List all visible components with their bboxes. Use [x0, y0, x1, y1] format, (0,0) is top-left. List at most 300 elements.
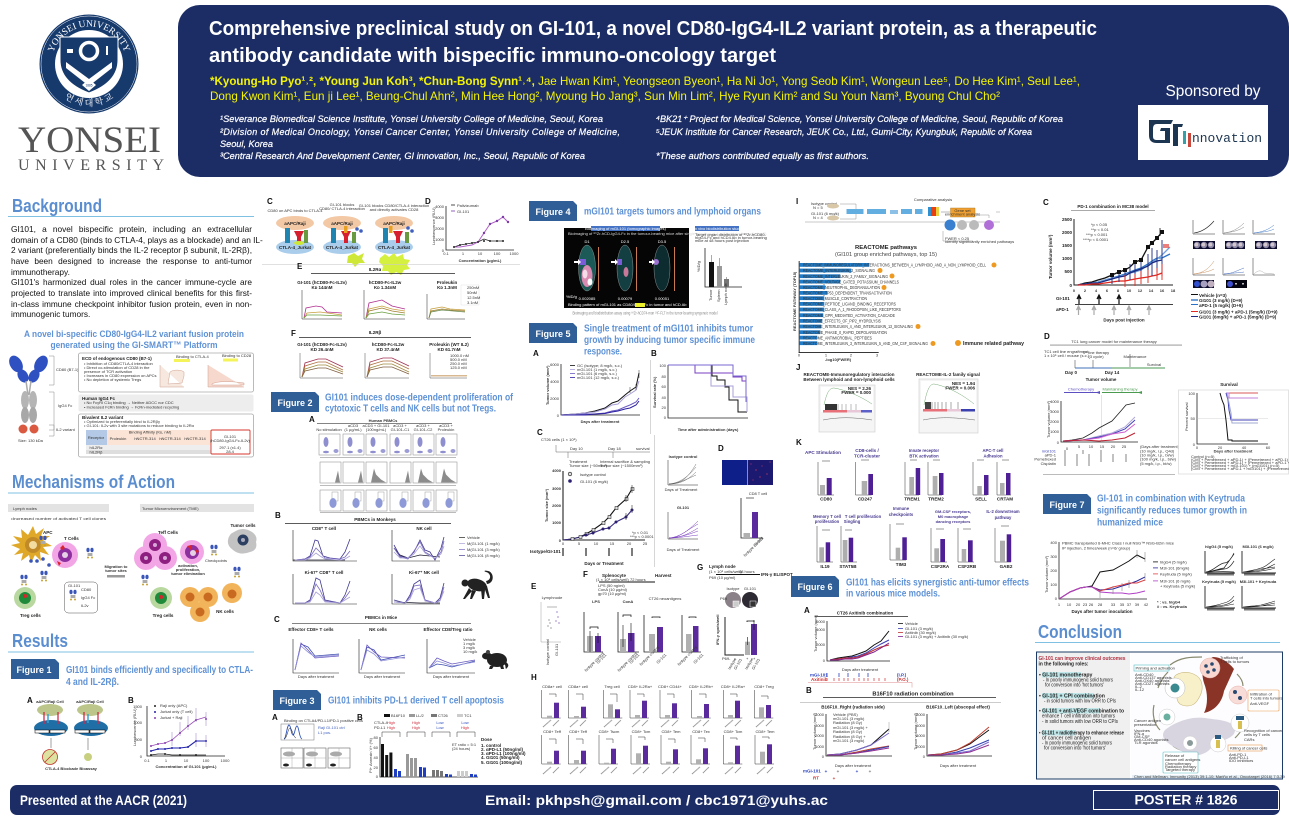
section heading: background: Background	[12, 196, 102, 216]
figure 6B heading	[800, 686, 1001, 702]
figure 6B: right side chart: Days after treatment	[835, 763, 872, 768]
figure 1A: blockade bioassay: aAPC/Raji Cell	[76, 699, 104, 704]
cancer immunity cycle diagram: Anti-CD27 agonists	[1135, 681, 1169, 686]
tumor volume chart: 10	[1089, 444, 1094, 449]
figure 5K: gene expression bar charts: APC Stimulation	[805, 450, 841, 455]
figure 2A: human PBMC flow cytometry: A	[309, 415, 315, 424]
conference note: Presented at the AACR (2021)	[20, 792, 187, 808]
figure 1B: dose response chart: 0.1	[144, 758, 151, 763]
panel: ECD of CD80: • No depletion of systemic Tregs	[84, 377, 141, 382]
figure 7C: PD-1 combination in MC38: Tumor volume (mm³)	[1048, 234, 1053, 279]
figure 7: individual tumor curves: Keytruda (5 mg/k)	[1202, 579, 1237, 584]
survival chart: 100	[1188, 391, 1196, 396]
figure 3B: apoptosis bar chart: High	[461, 725, 469, 730]
tumor volume chart: 2000	[1050, 419, 1060, 424]
reactome bar chart: REACTOME_IMMUNOREGULATORY_INTERACTIONS_BETWEEN_A_LYMPHOID_AND_A_NON_LYMPHOID_CELL	[803, 262, 986, 268]
figure 7C: PD-1 combination in MC38: **p < 0.01	[1091, 227, 1109, 232]
figure 2B: PBMCs in monkeys charts: NK cell	[416, 526, 432, 531]
figure 2C: PBMCs in mice charts: Days after treatment	[364, 674, 401, 679]
background paragraph: immunogenic tumors.	[11, 309, 90, 319]
header banner	[178, 5, 1289, 177]
background paragraph: domain of a CD80 (binds to CTLA-4, plays as a blockade) and an IL-	[11, 235, 263, 245]
figure 5F: splenocyte bar charts: Isotype control	[616, 651, 638, 673]
figure 5B: survival chart: 0	[664, 415, 667, 420]
figure 4: biodistribution bar chart: %ID/g	[696, 261, 701, 272]
figure 7 heading: humanized mice	[1097, 518, 1163, 528]
tumor volume chart: 0	[1057, 440, 1060, 445]
conclusion text: enhance T cell infiltration into tumors	[1042, 714, 1115, 720]
diagram: tumor microenvironment: tumor elimination	[171, 571, 205, 576]
figure 5B: survival chart: Time after administration (days)	[678, 427, 739, 432]
figure 1C: blockade diagrams: aAPC/Raji	[383, 221, 405, 226]
figure 4: bioimaging of mGI-101: Bioimaging of mGI-101 (tomographic images)	[585, 226, 667, 231]
figure 6A: CT26 axitinib chart: (I.P.)	[897, 672, 907, 678]
figure 7C: PD-1 combination in MC38: PD-1 combination in MC38 model	[1077, 204, 1149, 209]
figure 7: individual tumor curves	[1202, 544, 1277, 610]
figure 6B: right side chart: +	[869, 769, 872, 774]
figure 6A: CT26 axitinib chart: mGI-101	[810, 672, 828, 678]
figure 2A: human PBMC flow cytometry: Proleukin	[438, 427, 454, 432]
figure 2B: PBMCs in monkeys charts: PBMCs in Monkeys	[354, 517, 396, 522]
figure 5H: immune cell bar charts: CD8+ Tcm	[632, 729, 651, 734]
figure 3B: apoptosis bar chart: High	[387, 720, 395, 725]
figure 7: humanized mice tumor volume chart: 26	[1089, 602, 1094, 607]
figure 7: humanized mice tumor volume chart: M3I-101 (6mg/k)	[1160, 566, 1190, 570]
reactome bar chart: REACTOME PATHWAY (TOP15)	[792, 271, 797, 331]
figure 5J: GSEA enrichment plots: J	[796, 363, 800, 372]
figure 6A: CT26 axitinib chart: 2000	[816, 642, 826, 647]
figure 5J: GSEA enrichment plots: NES = 1.94	[952, 381, 975, 386]
figure 3B: apoptosis bar chart: High	[387, 725, 395, 730]
figure 5K: gene expression bar charts: checkpoints	[889, 512, 914, 517]
figure 7: humanized mice tumor volume chart: 400	[1050, 540, 1058, 545]
figure 5K: gene expression bar charts: proliferation	[815, 519, 840, 524]
antibody structure diagram: IL2 variant	[56, 427, 76, 432]
figure 5C: treatment timeline: survival	[636, 446, 650, 451]
figure 6 heading: in various mice models.	[846, 588, 940, 600]
figure 5F: splenocyte bar charts: GI-101	[628, 652, 641, 665]
section heading: results: Results	[12, 631, 68, 651]
subtitle: platform: A novel bi-specific CD80-IgG4-IL2 variant fusion protein	[24, 329, 244, 340]
figure 5C: tumor size chart: Isotype/GI-101	[530, 549, 561, 554]
figure 5A: tumor volume chart: mGI-101 (6 mg/k, s.c.)	[577, 371, 617, 376]
figure 5 heading: response.	[584, 346, 622, 358]
figure 5K: gene expression bar charts: Memory T cell	[813, 514, 841, 519]
figure 6A: CT26 axitinib chart: CT26 Axitinib combination	[837, 610, 894, 616]
figure 1C: blockade diagrams: CTLA-4_Jurkat	[378, 245, 411, 250]
cancer immunity cycle diagram: GM-CSF	[1134, 734, 1150, 739]
sponsored by label: Sponsored by	[1166, 83, 1260, 100]
tumor volume chart: 3000	[1050, 409, 1060, 414]
figure 1D: luminescence chart: GI-101	[457, 209, 470, 214]
figure 5F: splenocyte bar charts: Isotype control	[676, 645, 698, 667]
figure 1D: luminescence chart: 4000	[435, 204, 445, 209]
figure 1F: IL2R beta binding: 1000.0 nM	[450, 353, 469, 358]
figure 7: humanized mice tumor volume chart: # : vs. Keytruda	[1157, 604, 1188, 609]
figure 7C: PD-1 combination in MC38: 0	[1073, 288, 1076, 293]
figure 5G: lymph node harvest chart: Isotype	[727, 656, 738, 670]
figure 5G: lymph node harvest chart: Isotype	[744, 656, 755, 670]
figure 5F: splenocyte bar charts: Isotype control	[638, 645, 660, 667]
figure 5D: immunofluorescence and bar chart: GI-101	[752, 535, 765, 548]
figure 1D: luminescence chart: Luminescence (RLU)	[431, 207, 436, 245]
figure 5J: GSEA enrichment plots: REACTOME-IL-2 family signal	[916, 372, 980, 377]
logo seal: YONSEI UNIVERSITY	[48, 20, 130, 51]
conclusion text: for conversion into 'hot tumors'	[1045, 682, 1104, 688]
figure 1A: blockade bioassay: aAPC/Raji Cell	[36, 699, 64, 704]
reactome bar chart: -log10(FWER)	[825, 357, 852, 362]
figure 5A: tumor volume chart: mGI-101 (1 mg/k, s.c.)	[577, 367, 617, 372]
figure 7C: PD-1 combination in MC38: 0	[1069, 283, 1072, 288]
figure 5G: lymph node harvest chart: G	[697, 563, 703, 572]
university logo	[18, 14, 164, 174]
figure 5A: tumor volume chart: 0	[557, 413, 560, 418]
figure 5K: gene expression bar charts: pathway	[995, 515, 1012, 520]
figure 4: bioimaging of mGI-101: %ID/g	[566, 294, 577, 299]
poster number: POSTER # 1826	[1134, 792, 1238, 808]
figure 5G: lymph node harvest chart: GI-101	[751, 657, 761, 670]
figure 4: bioimaging of mGI-101: D3.5	[658, 239, 667, 244]
antibody structure diagram	[6, 353, 79, 443]
figure 1 heading: GI101 binds efficiently and specifically to CTLA-	[66, 665, 253, 676]
Treg cell in tumor: Treg cells	[153, 613, 174, 618]
figure 5C: tumor size chart: *p < 0.01	[632, 530, 649, 535]
figure 4: bioimaging of mGI-101: Bioimaging of ⁸⁹Zr-hCD-IgG4-Fc in the tumour-bearing mice after single injection at 4 mCi/ml labeling ratio (n=3)	[568, 231, 767, 236]
figure 6B: right side chart: Vehicle (PBS)	[833, 712, 858, 717]
figure 5C: treatment timeline: C	[537, 428, 543, 437]
figure 7C: PD-1 combination in MC38: Days post injection	[1103, 318, 1145, 322]
figure 7: humanized mice tumor volume chart: 35	[1120, 602, 1125, 607]
figure 1A: blockade bioassay	[27, 696, 108, 771]
figure 5B: survival chart: 60	[662, 384, 667, 389]
figure 5K: gene expression bar charts: K	[796, 438, 802, 447]
conclusion text: - In poorly immunogenic solid tumors	[1042, 740, 1112, 746]
cancer immunity cycle diagram: Infiltration of	[1250, 692, 1273, 696]
figure 5B: survival chart: Survival rate (%)	[652, 376, 657, 408]
reactome bar chart: REACTOME_PEPTIDE_LIGAND_BINDING_RECEPTORS	[803, 302, 896, 308]
reactome bar chart: REACTOME_ANTIMICROBIAL_PEPTIDES	[803, 336, 872, 342]
figure 5 heading	[529, 323, 755, 358]
cancer immunity cycle diagram: CARs	[1244, 737, 1254, 742]
figure 4: biodistribution bar chart: Tumor	[708, 289, 713, 301]
figure 5C: individual tumor curves	[665, 454, 700, 552]
figure 2A: human PBMC flow cytometry: aCD3 +	[439, 423, 453, 428]
cancer immunity cycle diagram: T cells into tumors	[1250, 696, 1282, 700]
figure 4: biodistribution bar chart: Spleen	[716, 290, 721, 302]
figure 5K: gene expression bar charts: TREM2	[928, 496, 944, 502]
figure 1 heading: 4 and IL-2Rβ.	[66, 677, 119, 688]
figure 2A: human PBMC flow cytometry: GI-101-C2	[414, 427, 433, 432]
figure 2C: PBMCs in mice charts: NK cells	[369, 627, 387, 632]
figure 5H: immune cell bar charts: CD8a+ cell	[542, 684, 562, 689]
figure 5F: splenocyte bar charts: ConA (10 µg/ml)	[598, 587, 628, 592]
conclusion text: • GI-101 + anti-VEGF combination to	[1039, 708, 1124, 714]
figure 6B: right side chart: Radiation (8 Gy)	[833, 720, 863, 725]
figure 1D: luminescence chart: 3000	[435, 215, 445, 220]
figure 3A: apoptosis flow plots: Raji GI-101 ctrl	[318, 725, 345, 730]
figure 4 caption: Bioimaging and biodistribution assay using ⁸⁹Zr-hCD74-mon ¹⁸F-FLT in the tumor-bearing syngeneic model	[572, 310, 718, 316]
figure 7C: PD-1 combination in MC38: GI-101	[1056, 296, 1070, 301]
figure 5C: tumor size chart: Tumor size (mm³)	[544, 488, 549, 522]
figure 1B: dose response chart: Jurkat + Raji	[160, 715, 182, 720]
diagram: lymph nodes: •Increased number of activated T cell clones	[11, 516, 106, 521]
figure 7: humanized mice tumor volume chart: PBMC transplanted ß-MHC Class I null NSG™ NSG-B2m mice	[1062, 540, 1175, 546]
figure 5B: survival chart: 20	[662, 405, 667, 410]
figure 5A: tumor volume chart: 6000	[550, 362, 560, 367]
figure 7C: PD-1 combination in MC38: aPD-1	[1056, 307, 1069, 312]
figure 5F: splenocyte bar charts	[583, 570, 705, 673]
figure 6B: left abscopal chart: 4000	[916, 733, 926, 738]
figure 5C: tumor size chart: 0	[562, 541, 565, 546]
cancer immunity cycle diagram: Anti-CD40	[1135, 672, 1154, 677]
figure 2A: human PBMC flow cytometry: Human PBMCs	[369, 418, 398, 423]
figure 1F: IL2R beta binding: hCD80-Fc-IL2w	[372, 342, 405, 347]
figure 7D: TC1 maintenance therapy: Survival	[1147, 362, 1161, 367]
tumor volume chart: 4000	[1050, 399, 1060, 404]
figure 3A: apoptosis flow plots: L1 pos.	[318, 730, 331, 735]
figure 5I: RNA-seq workflow	[796, 197, 1014, 244]
figure 5C: tumor size chart: 1000	[552, 520, 562, 525]
panel: bivalent IL2 variant with affinity table: hIL2Rα	[90, 445, 103, 450]
figure 7: humanized mice tumor volume chart	[1044, 540, 1196, 614]
figure 5K: gene expression bar charts: TCR-cluster	[854, 454, 880, 458]
reactome bar chart: REACTOME_INTERLEUKIN_2_SIGNALING	[803, 268, 875, 274]
figure 1F: IL2R beta binding: 500.0 nM	[450, 357, 467, 362]
figure 1D: luminescence chart: 1000	[435, 237, 445, 242]
figure 7: humanized mice tumor volume chart: 37	[1127, 602, 1132, 607]
figure 3B: apoptosis bar chart: TC1	[464, 713, 472, 718]
figure 5H: immune cell bar charts: CD8+ Treg	[754, 684, 774, 689]
figure 5C: tumor size chart: 3000	[552, 486, 562, 491]
figure 1D: luminescence chart	[425, 197, 519, 263]
figure 4: bioimaging of mGI-101: D2.5	[621, 239, 630, 244]
cancer immunity cycle diagram: Anti-OX40 agonists	[1135, 678, 1169, 683]
figure 5A: tumor volume chart: 2000	[550, 396, 560, 401]
figure 6A: CT26 axitinib chart: Vehicle	[905, 621, 919, 626]
figure 6B: right side chart: 4000	[815, 712, 825, 717]
figure 5D: immunofluorescence and bar chart	[718, 444, 773, 558]
figure 4: biodistribution bar chart: mice at 48 hours post injection	[695, 238, 749, 243]
figure 6B: right side chart: +	[837, 769, 840, 774]
cancer immunity cycle diagram: presentation	[1134, 722, 1156, 727]
figure 1E: IL2R alpha binding: E	[297, 262, 303, 271]
figure 1C: blockade diagrams	[267, 197, 429, 275]
figure 1D: luminescence chart: 1000	[510, 251, 519, 256]
subtitle: platform	[24, 329, 244, 351]
reactome bar chart: REACTOME_TP53_DEPENDENT_TRANSACTIVATION	[803, 290, 892, 296]
figure 5H: immune cell bar charts	[531, 673, 775, 774]
tumor volume chart: Tumor volume (mm³)	[1046, 400, 1051, 438]
figure 1B: dose response chart: 1000	[221, 758, 230, 763]
figure 5G: lymph node harvest chart: +	[746, 656, 749, 661]
panel: bivalent IL2 variant with affinity table: hNCTR-314	[184, 436, 206, 441]
affiliations left: Seoul, Korea	[220, 139, 273, 149]
figure 5A: tumor volume chart: mGI-101 (12 mg/k, s.c.)	[577, 375, 620, 380]
survival chart: Days after treatment	[1214, 448, 1253, 454]
affiliations right: *These authors contributed equally as first authors.	[656, 151, 869, 161]
figure 1D: luminescence chart: Palivizumab	[457, 203, 479, 208]
figure 5H: immune cell bar charts: CD8+ CD44+	[658, 684, 683, 689]
figure 3B: apoptosis bar chart: High	[412, 720, 420, 725]
figure 6B: left abscopal chart	[913, 704, 992, 768]
cancer immunity cycle diagram: Release of	[1165, 753, 1185, 758]
figure 7C: PD-1 combination in MC38: 2000	[1062, 230, 1072, 235]
inset: GI-101 structure	[64, 582, 98, 613]
figure 5G: lymph node harvest chart: IFN-γ ELISPOT	[761, 572, 793, 577]
figure 5B: survival chart: 40	[662, 395, 667, 400]
figure 6B: right side chart: RT	[813, 776, 819, 780]
panel: bivalent IL2 variant with affinity table: Proleukin	[110, 436, 126, 441]
figure 7: humanized mice tumor volume chart: Keytruda (5 mg/k)	[1160, 572, 1192, 576]
blood vessel	[1203, 657, 1234, 713]
lymph node	[1174, 672, 1202, 706]
tumor volume chart: 1000	[1050, 429, 1060, 434]
reactome pathways heading: REACTOME pathways	[855, 245, 917, 251]
tumor volume chart: (Days after treatment)	[1140, 444, 1180, 449]
tumor volume chart	[1034, 377, 1180, 475]
figure 5C: tumor size chart: 2000	[552, 503, 562, 508]
panel: bivalent IL2 variant with affinity table: Bivalent IL2 variant	[82, 415, 124, 420]
figure 7D: TC1 maintenance therapy: TC1 lung cancer model for maintenance therapy	[1071, 339, 1157, 344]
diagram: lymph nodes: Lymph nodes	[13, 506, 37, 511]
figure 6B: left abscopal chart: B16F10_Left (abscopal effect)	[926, 704, 990, 710]
figure 1B: dose response chart: Jurkat only (T cell)	[160, 709, 193, 714]
figure 5G: lymph node harvest chart: GI-101	[733, 657, 743, 670]
figure 6B: right side chart: +	[825, 769, 828, 774]
figure 1E: IL2R alpha binding: 12.5nM	[467, 295, 480, 300]
reactome bar chart: REACTOME_NEUTROPHIL_DEGRANULATION	[803, 285, 880, 291]
panel: human IgG4 Fc: Human IgG4 Fc	[82, 396, 116, 401]
figure 7: humanized mice tumor volume chart: 33	[1111, 602, 1116, 607]
figure 1B: dose response chart: 10	[184, 758, 189, 763]
NK cell cluster: NK cells	[216, 609, 234, 614]
panel: bivalent IL2 variant with affinity table: hIL2Rβ	[90, 450, 103, 454]
figure 5K: gene expression bar charts: CSF2RA	[931, 564, 950, 569]
figure 5K: gene expression bar charts: CSF2RB	[958, 564, 977, 569]
figure 7C: PD-1 combination in MC38: *p < 0.05	[1091, 222, 1108, 227]
figure 5F: splenocyte bar charts: GI-101	[595, 652, 608, 665]
figure 1F: IL2R beta binding: F	[291, 329, 296, 338]
figure 6B: right side chart: +	[856, 769, 859, 774]
figure 6B: right side chart: Tumor volume (mm³)	[812, 712, 817, 750]
figure 1E: IL2R alpha binding: Kᴅ 1.34nM	[374, 285, 396, 290]
panel: human IgG4 Fc: • No FcγRI C1q binding → Neither ADCC nor CDC	[84, 400, 174, 405]
figure 1E: IL2R alpha binding: Proleukin	[437, 280, 457, 285]
figure 4: biodistribution bar chart: Lymph node	[723, 282, 728, 305]
logo seal	[40, 14, 138, 114]
figure 1E: IL2R alpha binding: IL2Rα	[369, 267, 381, 272]
figure 5C: treatment timeline	[537, 428, 650, 468]
conclusion text: in the following roles:	[1038, 662, 1089, 668]
sponsor logo: nnovation	[1192, 131, 1262, 146]
figure 2 heading: cytotoxic T cells and NK cells but not Tregs.	[325, 404, 496, 414]
tumor volume chart: (5 mg/k, i.p., bi/w)	[1140, 461, 1172, 466]
figure 5H: immune cell bar charts: CD8+ Teff	[543, 729, 562, 734]
background paragraph: GI101's harmonized dual roles in the cancer immune-cycle are	[11, 277, 252, 287]
figure 4: bioimaging of mGI-101	[564, 226, 767, 308]
figure 4: biodistribution bar chart: Target organ distribution of ⁸⁹Zr-hCD80-	[695, 232, 766, 237]
figure 7: humanized mice tumor volume chart: 42	[1144, 602, 1149, 607]
figure 3B: apoptosis bar chart: 80	[374, 735, 379, 740]
figure 2B legend	[459, 535, 500, 558]
cancer immunity cycle diagram: Anti-PD-L1	[1229, 755, 1249, 760]
authors	[210, 74, 1080, 103]
affiliations left: ¹Severance Biomedical Science Institute, Yonsei University College of Medicine, Seoul, Korea	[220, 114, 603, 124]
figure 3B: apoptosis bar chart: Dose	[481, 737, 493, 742]
figure 5F: splenocyte bar charts: GI-101	[655, 652, 668, 665]
background paragraph: projected to translate into improved clinical benefits for this first-	[11, 288, 252, 298]
figure 5J: GSEA enrichment plots: Between lymphoid and non-lymphoid cells	[803, 377, 895, 382]
figure 1D: luminescence chart: 10	[478, 251, 483, 256]
figure 7 heading: significantly reduces tumor growth in	[1097, 506, 1247, 516]
figure 5E: lymphnode scatter: Lymphnode	[542, 595, 563, 600]
figure 5H: immune cell bar charts: CD8+ Teff	[569, 729, 588, 734]
figure 7C: PD-1 combination in MC38: ****p < 0.0001	[1083, 237, 1109, 242]
figure 7: individual tumor curves: hIgG4 (5 mg/k)	[1205, 544, 1234, 549]
logo wordmark YONSEI: YONSEI	[18, 120, 161, 161]
figure 5G: lymph node harvest chart: P69	[722, 656, 730, 661]
reactome bar chart: REACTOME_MUSCLE_CONTRACTION	[803, 296, 867, 302]
reactome bar chart: REACTOME_INTERLEUKIN_2_FAMILY_SIGNALING	[803, 274, 888, 280]
reactome pathways heading	[835, 245, 937, 258]
cancer immunity cycle diagram: cells by T cells	[1244, 732, 1270, 737]
figure 7: humanized mice tumor volume chart: * : vs. hIgG4	[1157, 600, 1181, 604]
reactome bar chart: REACTOME_GPR_MEDIATED_ACTIVATION_CASCADE	[803, 313, 895, 319]
Teff cells cluster: Teff Cells	[158, 530, 178, 535]
background paragraph	[11, 224, 263, 319]
panel: ECD of CD80: • Increases in CD80 expression on APCs	[84, 373, 157, 378]
figure 6B: right side chart: +	[833, 776, 836, 781]
figure 1F: IL2R beta binding: IL2Rβ	[369, 330, 382, 335]
figure 5G: lymph node harvest chart: +	[753, 656, 756, 661]
logo seal: 연 세 대 학 교	[66, 93, 114, 108]
reactome bar chart: 2	[850, 352, 853, 358]
figure 6B: right side chart: 1000	[815, 744, 825, 749]
figure 2A: human PBMC flow cytometry: aCD3	[348, 423, 359, 428]
figure 2C: PBMCs in mice charts: 10 mg/k	[463, 649, 477, 654]
figure 5K: gene expression bar charts: Immune	[893, 506, 910, 511]
figure 7: humanized mice tumor volume chart: IP injection, 2 times/week (n=6/ group)	[1062, 546, 1131, 550]
figure 5J: GSEA enrichment plots: FWER = 0.006	[945, 386, 975, 390]
figure 5C: tumor size chart	[530, 468, 654, 566]
figure 1B: dose response chart: 1	[165, 758, 168, 763]
panel: ECD of CD80: ECD of endogenous CD80 (B7-1)	[82, 356, 152, 361]
figure 6B: right side chart: mGI-101	[803, 768, 821, 774]
figure 7: humanized mice tumor volume chart: M3I-101 (6 mg/k)	[1160, 578, 1191, 584]
figure 1B: dose response chart	[128, 696, 230, 769]
figure 5F: splenocyte bar charts: Splenocyte	[602, 573, 627, 578]
figure 4: bioimaging of mGI-101: 0.00051	[655, 296, 670, 301]
figure 1C: blockade diagrams: aAPC/Raji	[284, 221, 306, 226]
figure 7: humanized mice tumor volume chart: 0	[1055, 596, 1058, 601]
panel: ECD of CD80: • Inhibition of CD80/CTLA-4 interaction	[84, 361, 153, 366]
background paragraph: GI101, a novel bispecific protein, including an extracellular	[11, 224, 252, 234]
figure 1D: luminescence chart: D	[425, 197, 431, 206]
logo wordmark UNIVERSITY: UNIVERSITY	[18, 157, 164, 174]
figure 1E: IL2R alpha binding: Kᴅ 144nM	[311, 285, 333, 290]
panel: ECD of CD80: Binding to CTLA-4	[176, 354, 209, 359]
figure 5C: tumor size chart: 15	[610, 541, 615, 546]
figure 1E: IL2R alpha binding: GI-101 (hCD80-Fc-IL2v)	[297, 280, 347, 285]
figure 7: individual tumor curves: M3I-101 (6 mg/k)	[1242, 544, 1274, 549]
diagram: lymph nodes	[8, 504, 109, 618]
figure 3B: apoptosis bar chart: LL/2	[416, 713, 425, 718]
figure 6B: right side chart: 2000	[815, 733, 825, 738]
figure 1B: dose response chart: Raji only (APC)	[160, 703, 188, 708]
figure 5G: lymph node harvest chart: (1 × 10⁵ cells/well)	[709, 569, 742, 574]
figure 4 heading: Figure 4	[535, 207, 571, 217]
figure 1F: IL2R beta binding: Proleukin (WT IL2)	[429, 342, 469, 347]
